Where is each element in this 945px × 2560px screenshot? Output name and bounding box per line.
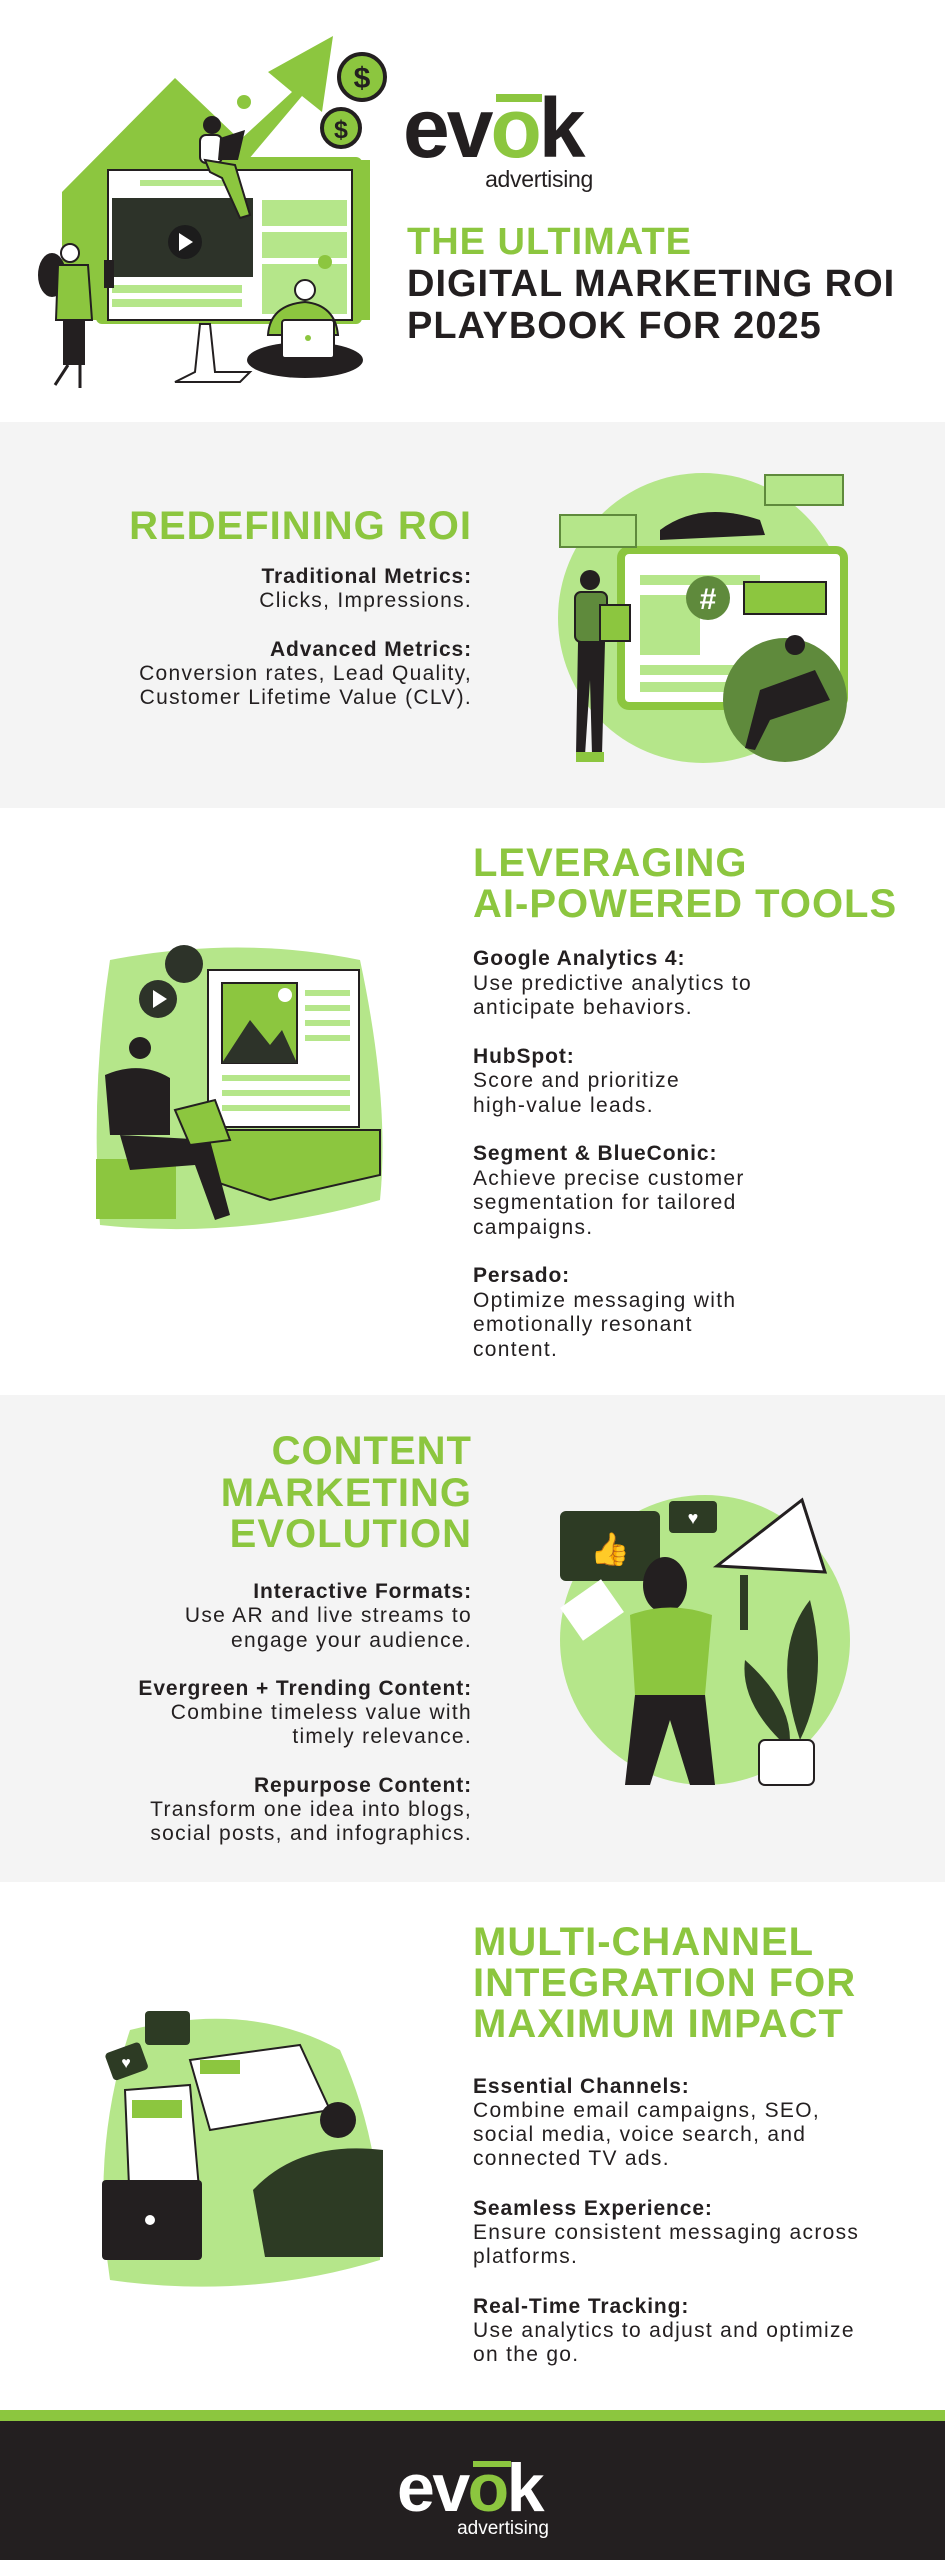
text block: content strategies: social posts, and infographics.	[150, 1822, 472, 1845]
heading: multi-channel integration	[473, 1920, 856, 2046]
text block: metrics: Conversion rates, Lead Quality,	[139, 662, 472, 685]
monitor	[96, 157, 362, 382]
text block: content strategies: Evergreen + Trending Content:	[138, 1677, 472, 1700]
text block: tools list	[473, 947, 752, 1360]
text block: channels: Combine email campaigns, SEO,	[473, 2099, 820, 2122]
text block: tools list: Segment & BlueConic:	[473, 1142, 717, 1165]
panel: redefining ROI	[0, 422, 945, 808]
text block: content strategies	[138, 1580, 472, 1845]
text block: metrics: Clicks, Impressions.	[259, 589, 472, 612]
text block: channels	[473, 2075, 859, 2366]
illustration: man with laptop and scrolls	[102, 2011, 383, 2287]
hearts	[66, 95, 332, 269]
header section	[0, 0, 945, 422]
heading: content marketing evolution: CONTENT	[272, 1429, 472, 1473]
illustration: woman with megaphone	[560, 1495, 850, 1786]
text block: tools list: Google Analytics 4:	[473, 947, 685, 970]
illustration: social media monitor	[558, 473, 848, 763]
text block: tools list: segmentation for tailored	[473, 1191, 737, 1214]
text block: content strategies: Interactive Formats:	[253, 1580, 472, 1603]
panel: multi-channel integration	[0, 1882, 945, 2410]
text block: channels: Seamless Experience:	[473, 2197, 713, 2220]
text block: content strategies: Repurpose Content:	[254, 1774, 472, 1797]
heading: content marketing evolution: MARKETING	[221, 1470, 472, 1514]
heading: redefining roi: REDEFINING ROI	[129, 504, 472, 548]
coins	[322, 54, 385, 147]
logo: evok advertising: advertising	[485, 166, 593, 192]
text block: tools list: Persado:	[473, 1264, 570, 1287]
panel: AI-powered tools	[0, 808, 945, 1395]
coins: $	[354, 62, 371, 95]
growth arrow	[62, 36, 370, 320]
illustration: social media monitor: #	[700, 583, 717, 616]
heading: content marketing evolution	[221, 1429, 472, 1556]
heading: content marketing evolution: EVOLUTION	[230, 1512, 472, 1556]
text block: channels: Use analytics to adjust and optimize	[473, 2319, 855, 2342]
text block: tools list: Optimize messaging with	[473, 1288, 736, 1312]
text block: tools list: Use predictive analytics to	[473, 972, 752, 994]
text block: channels: Ensure consistent messaging across	[473, 2221, 859, 2244]
text block: tools list: Achieve precise customer	[473, 1166, 745, 1190]
footer logo: evok	[397, 2450, 542, 2526]
text block: channels: Real-Time Tracking:	[473, 2295, 689, 2318]
illustration: woman with megaphone: ♥	[688, 1508, 698, 1528]
text block: content strategies: timely relevance.	[292, 1725, 472, 1748]
text block: channels: on the go.	[473, 2343, 579, 2366]
title: PLAYBOOK FOR 2025	[407, 305, 822, 347]
text block: content strategies: engage your audience.	[231, 1629, 472, 1652]
text block: tools list: high-value leads.	[473, 1094, 654, 1116]
header illustration: monitor, growth arrow, people	[38, 36, 387, 388]
person bottom with laptop	[247, 280, 363, 378]
heading: multi-channel integration: MAXIMUM IMPACT	[473, 2002, 844, 2046]
text block: channels: social media, voice search, and	[473, 2123, 806, 2146]
heading: multi-channel integration: INTEGRATION FOR	[473, 1961, 856, 2005]
text block: tools list: campaigns.	[473, 1216, 593, 1238]
heading: leveraging ai-powered tools: AI-POWERED TOOLS	[473, 882, 897, 926]
text block: metrics: Advanced Metrics:	[270, 638, 472, 661]
text block: tools list: emotionally resonant	[473, 1313, 693, 1336]
text block: tools list: Score and prioritize	[473, 1069, 680, 1092]
heading: leveraging ai-powered tools: LEVERAGING	[473, 841, 747, 885]
footer logo: advertising	[457, 2518, 549, 2539]
title: THE ULTIMATE	[407, 221, 692, 263]
person left	[38, 244, 114, 388]
text block: content strategies: Transform one idea into blogs,	[150, 1798, 472, 1821]
person on top	[200, 116, 250, 218]
footer	[0, 2410, 945, 2560]
text block: content strategies: Combine timeless value with	[171, 1701, 472, 1724]
logo: evok advertising: evok	[403, 81, 582, 175]
text block: channels: platforms.	[473, 2245, 578, 2268]
text block: channels: Essential Channels:	[473, 2075, 690, 2098]
title: DIGITAL MARKETING ROI	[407, 263, 895, 305]
text block: metrics: Traditional Metrics:	[261, 565, 472, 588]
text block: channels: connected TV ads.	[473, 2147, 670, 2170]
coins: $	[334, 116, 348, 144]
text block: metrics: Customer Lifetime Value (CLV).	[140, 686, 472, 709]
heading: multi-channel integration: MULTI-CHANNEL	[473, 1920, 814, 1964]
text block: tools list: HubSpot:	[473, 1044, 575, 1068]
panel: content marketing evolution	[0, 1395, 945, 1882]
illustration: woman with megaphone: 👍	[590, 1531, 630, 1567]
text block: metrics	[139, 565, 472, 709]
text block: content strategies: Use AR and live streams to	[185, 1604, 472, 1627]
title	[407, 221, 895, 347]
illustration: person with laptop and content page	[96, 945, 382, 1230]
illustration: man with laptop and scrolls: ♥	[121, 2055, 131, 2072]
text block: tools list: content.	[473, 1338, 558, 1360]
text block: tools list: anticipate behaviors.	[473, 996, 693, 1019]
heading: leveraging ai-powered tools	[473, 841, 897, 926]
